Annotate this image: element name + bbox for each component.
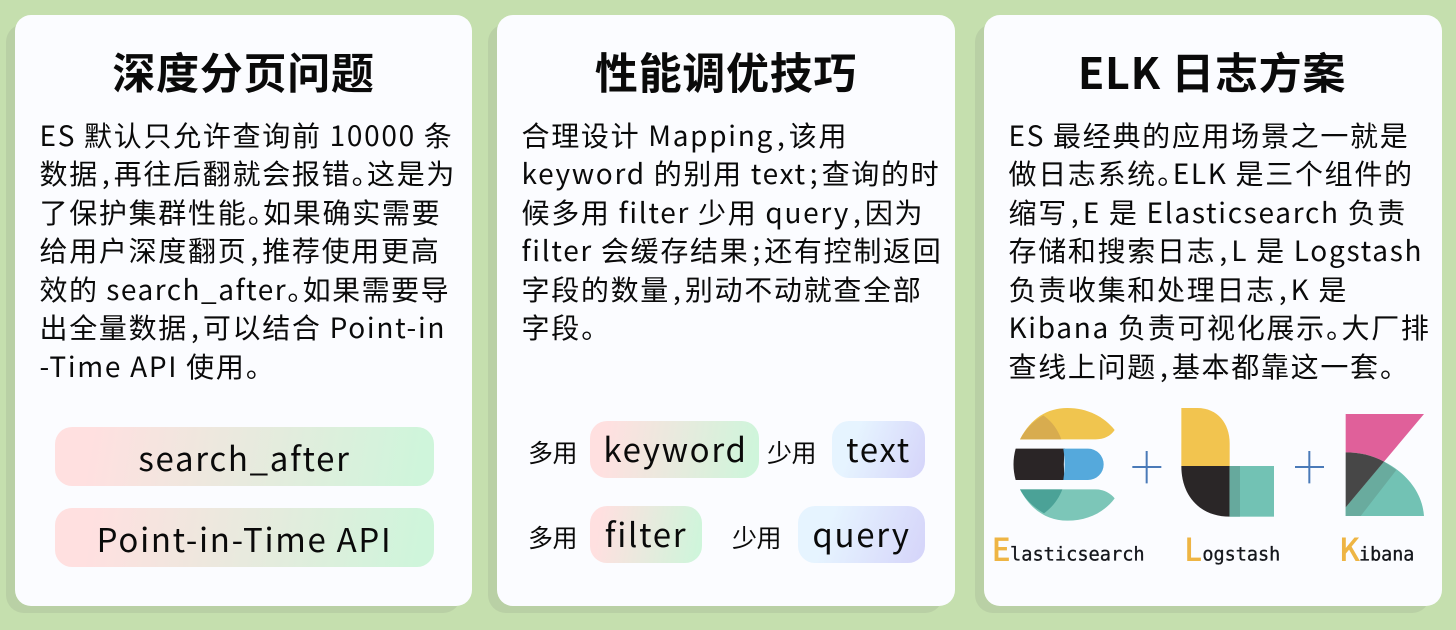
pill: query (798, 506, 925, 563)
icon: plus (1132, 451, 1161, 483)
pill: search_after: search_after (138, 433, 351, 481)
panel: deep pagination (15, 15, 472, 606)
text block: 了保护集群性能。如果确实需要 (40, 192, 441, 232)
icon: Elasticsearch logo (1014, 408, 1115, 521)
icon: Kibana logo (1346, 414, 1424, 516)
label: Logstash: L (1185, 524, 1201, 569)
pill: Point-in-Time API: Point-in-Time API (97, 514, 392, 562)
pill: Point-in-Time API (55, 508, 434, 567)
panel: performance tuning (497, 15, 955, 606)
text block: ES 默认只允许查询前 10000 条 (40, 114, 454, 154)
text block: 字段。 (522, 307, 597, 347)
pill: text (832, 421, 925, 478)
text block (522, 114, 942, 347)
panel shadow: middle (488, 24, 943, 613)
text block: keyword 的别用 text;查询的时 (522, 153, 940, 193)
pill: text: text (846, 424, 911, 472)
text block: ES 最经典的应用场景之一就是 (1008, 114, 1409, 154)
pill: filter: filter (605, 509, 687, 557)
text block: 数据,再往后翻就会报错。这是为 (40, 153, 456, 193)
panel shadow: right (975, 24, 1430, 613)
text block: 合理设计 Mapping,该用 (522, 114, 848, 154)
text block: 负责收集和处理日志,K 是 (1008, 268, 1348, 308)
pill: keyword: keyword (603, 424, 748, 472)
text block: 给用户深度翻页,推荐使用更高 (40, 230, 440, 270)
pill: filter (590, 506, 702, 563)
label: Kibana: ibana (1359, 544, 1414, 565)
heading: 深度分页问题 (112, 40, 375, 102)
text block: 存储和搜索日志,L 是 Logstash (1008, 230, 1423, 270)
label: Kibana: K (1339, 524, 1359, 569)
label: Elasticsearch: E (992, 524, 1010, 569)
label: Elasticsearch: lasticsearch (1010, 544, 1145, 565)
pill: query: query (812, 509, 911, 557)
heading: ELK 日志方案 (1078, 40, 1346, 102)
text block: 做日志系统。ELK 是三个组件的 (1008, 153, 1414, 193)
label: use more: 多用 (528, 519, 577, 555)
text block: 查线上问题,基本都靠这一套。 (1008, 346, 1395, 386)
icon: plus (1295, 451, 1324, 483)
panel shadow: left (6, 24, 461, 613)
text block: 出全量数据,可以结合 Point-in (40, 307, 446, 347)
panel: ELK logging (984, 15, 1442, 606)
text block (40, 114, 456, 386)
text block: -Time API 使用。 (40, 346, 261, 386)
label: use less: 少用 (767, 434, 816, 470)
text block: 字段的数量,别动不动就查全部 (522, 268, 922, 308)
text block (1008, 114, 1431, 386)
label: use less: 少用 (732, 519, 781, 555)
label: use more: 多用 (528, 434, 577, 470)
text block: 候多用 filter 少用 query,因为 (522, 192, 924, 232)
icon: Logstash logo (1181, 408, 1274, 517)
pill: search_after (55, 427, 434, 486)
ELK logos diagram (992, 408, 1424, 569)
text block: 效的 search_after。如果需要导 (40, 268, 450, 308)
label: Logstash: ogstash (1202, 544, 1280, 565)
text block: 缩写,E 是 Elasticsearch 负责 (1008, 192, 1407, 232)
text block: Kibana 负责可视化展示。大厂排 (1008, 307, 1431, 347)
heading: 性能调优技巧 (595, 40, 857, 102)
text block: filter 会缓存结果;还有控制返回 (522, 230, 942, 270)
